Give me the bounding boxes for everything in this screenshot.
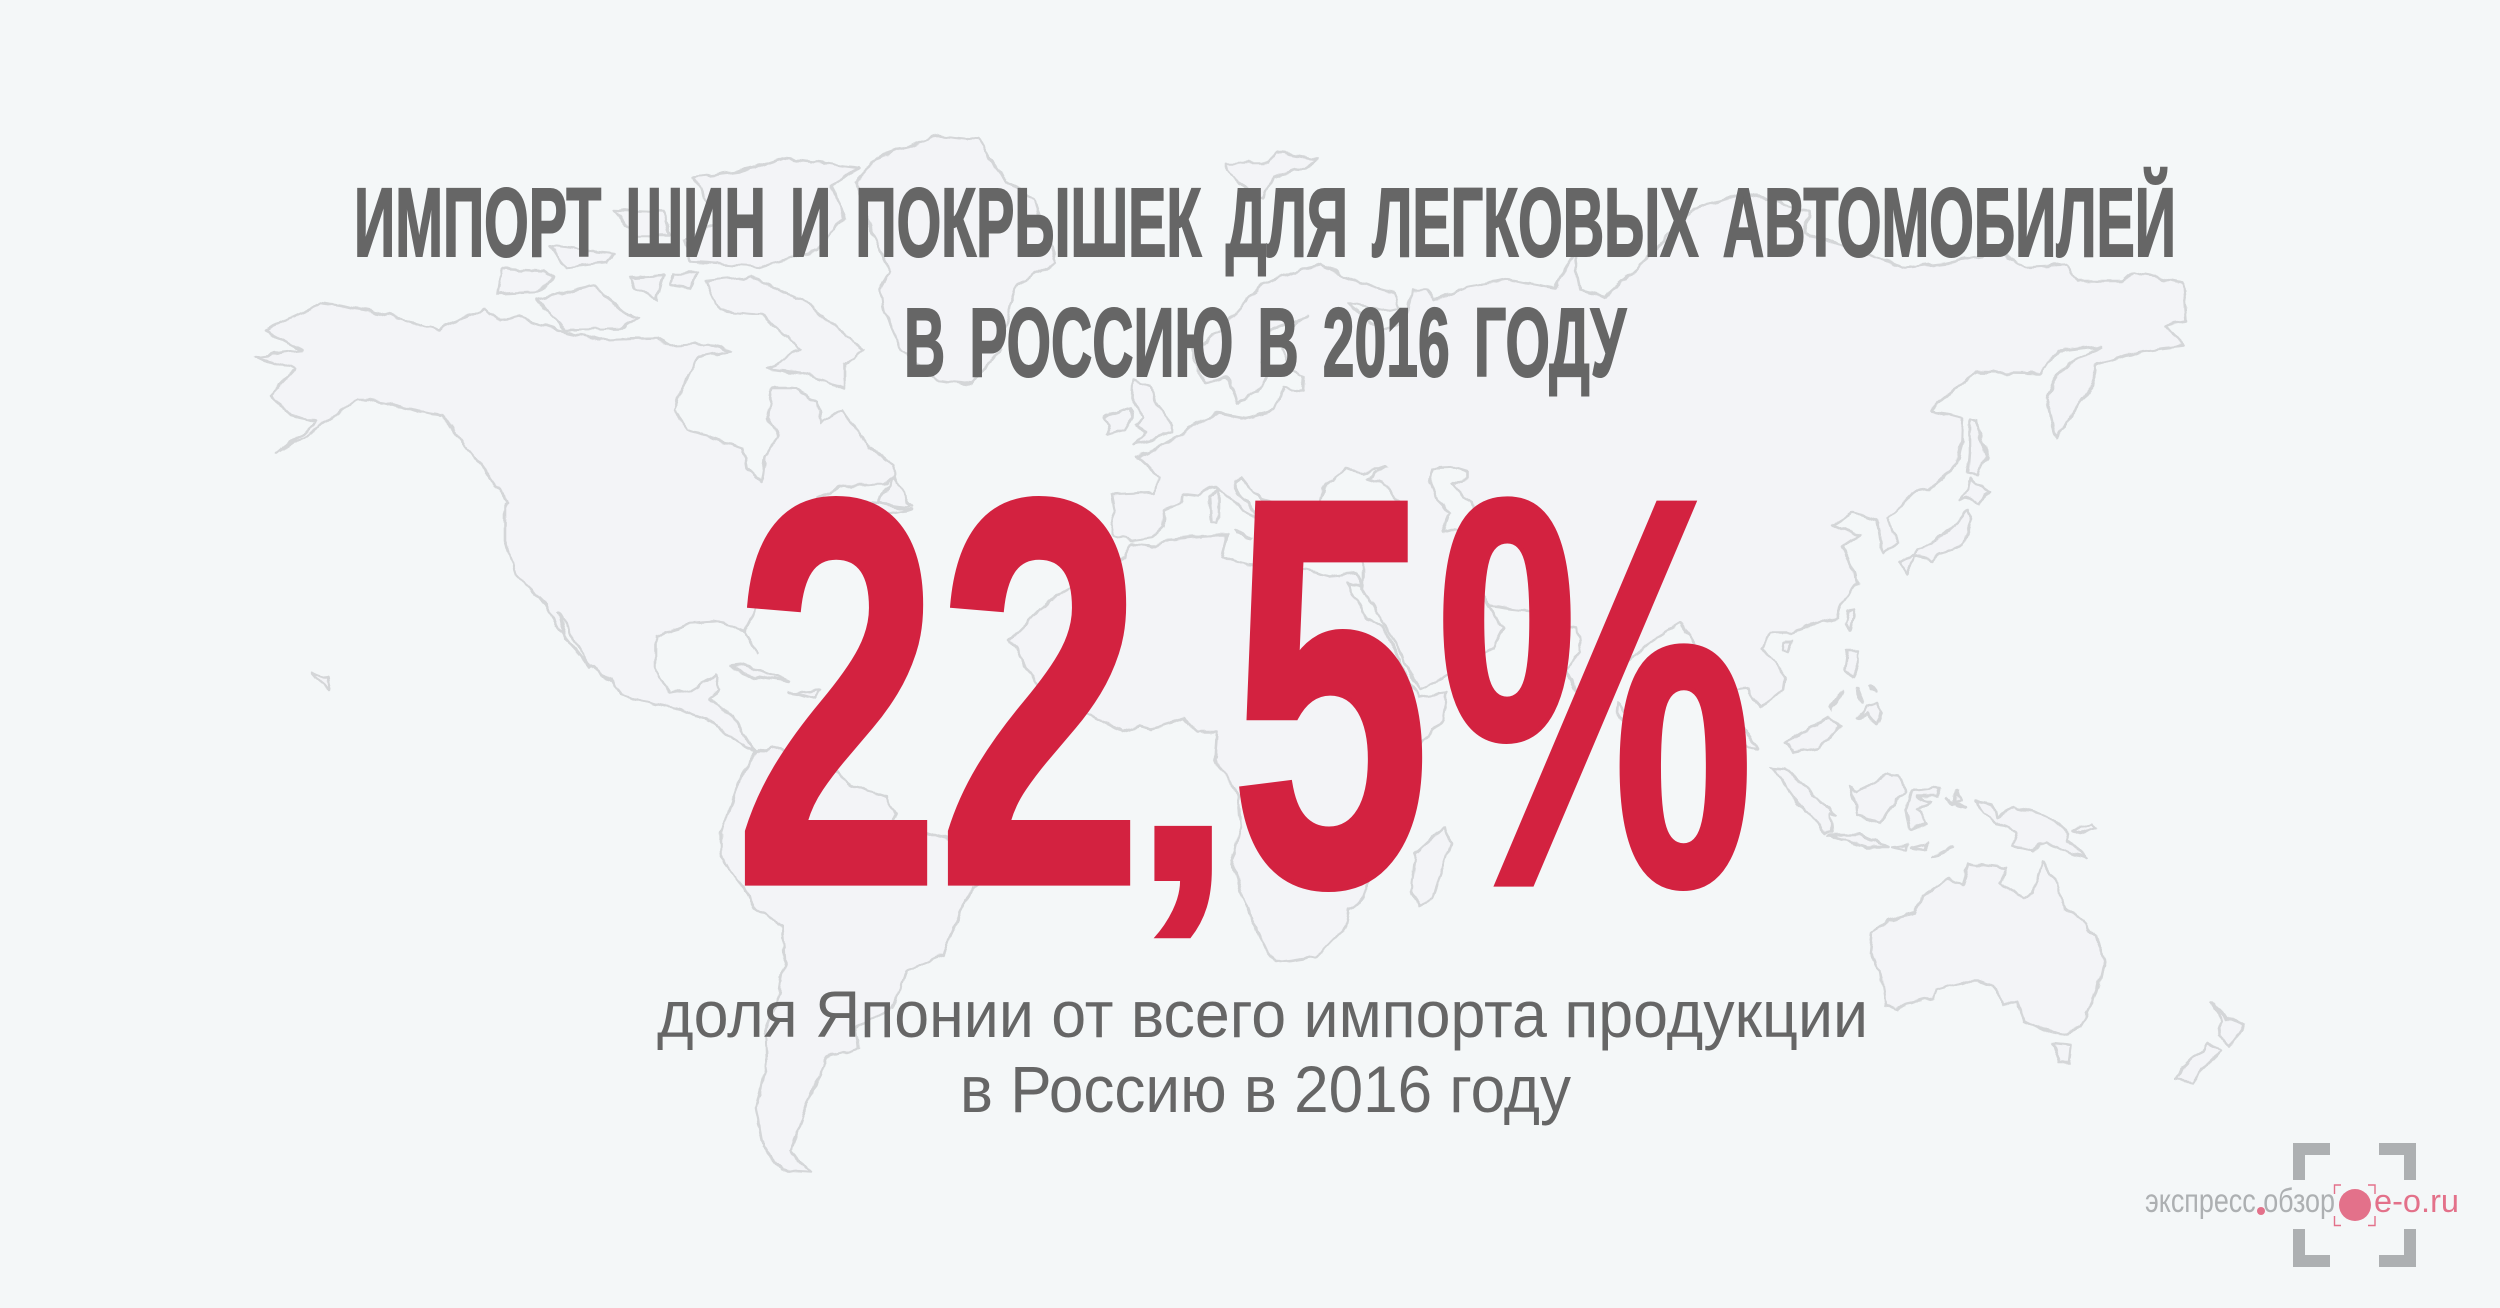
map: Australia [1870, 862, 2104, 1035]
logo: domain: e-o.ru [2374, 1183, 2459, 1219]
map: Philippines [1830, 650, 1882, 725]
world map background [256, 135, 2245, 1172]
map: Caribbean and Newfoundland [312, 478, 912, 698]
map: New Zealand [2176, 1002, 2245, 1083]
map: Africa [1010, 535, 1447, 963]
map: Greenland [856, 135, 1056, 384]
logo: pink dot [2257, 1207, 2265, 1215]
digit 2: 2 [733, 384, 941, 1002]
map: Tasmania [2053, 1043, 2071, 1063]
map: North America [256, 303, 912, 753]
logo: viewfinder brackets [2293, 1143, 2416, 1267]
map: Eurasia [1110, 193, 2186, 748]
subtitle line 1: доля Японии от всего импорта продукции [657, 977, 1868, 1051]
title line 2: В РОССИЮ В 2016 ГОДУ [904, 288, 1627, 397]
title [354, 168, 2176, 397]
percent sign: % [1436, 383, 1755, 1002]
map: New Guinea [1977, 802, 2096, 858]
subtitle line 2: в Россию в 2016 году [960, 1052, 1571, 1126]
map: Mediterranean islands [1210, 490, 1250, 538]
map: Sri Lanka [1617, 702, 1628, 723]
map: Black Sea [1320, 466, 1400, 520]
map: Caspian Sea [1430, 467, 1480, 532]
comma: , [1126, 547, 1239, 960]
logo [2145, 1143, 2459, 1267]
map: Arctic islands [498, 158, 863, 388]
map: South America [721, 747, 983, 1172]
map: Sakhalin [1968, 420, 1987, 475]
digit 2: 2 [936, 384, 1144, 1002]
map: Indonesia and Malaysia [1772, 717, 1966, 857]
map: Madagascar [1411, 827, 1451, 905]
big number 22,5% [733, 383, 1755, 1002]
logo: wordmark: экспресс.обзор [2145, 1182, 2335, 1219]
map: Taiwan and Hainan [1782, 610, 1855, 652]
map: Japan [1900, 478, 1990, 573]
logo: pink circle [2339, 1189, 2371, 1221]
map: Great Britain and Ireland [1105, 380, 1172, 445]
digit 5: 5 [1230, 383, 1430, 1001]
map: Iceland [1227, 152, 1318, 200]
logo: small pink brackets [2334, 1185, 2375, 1226]
subtitle [657, 977, 1868, 1126]
